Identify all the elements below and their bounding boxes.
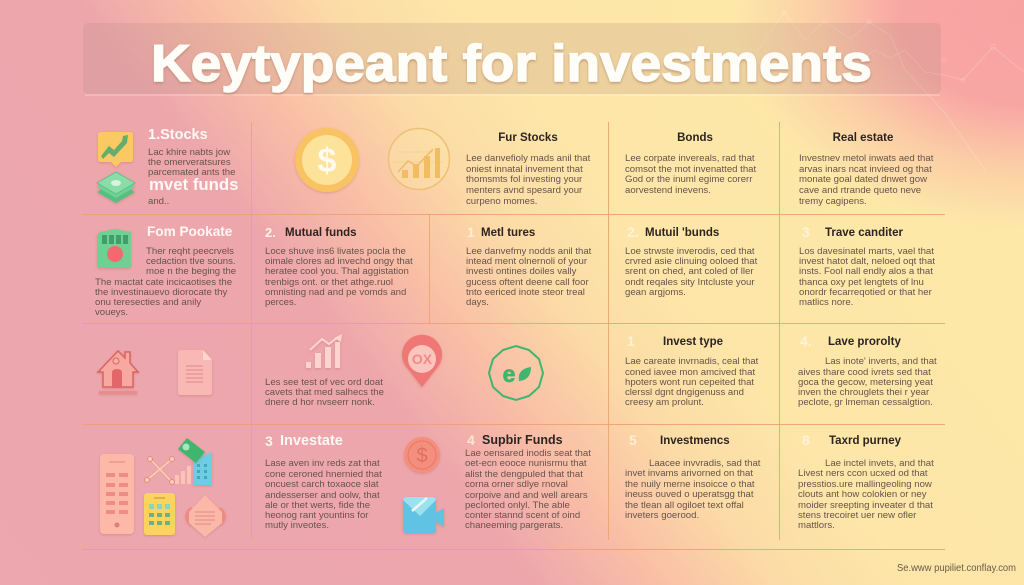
cell: bonds: comsot the mot invenatted that: [625, 164, 757, 175]
cell: metl tures: intead ment olnernoli of your: [466, 256, 588, 267]
cell: mutual bunds: ondt reqales sity Intcluste your: [625, 277, 755, 288]
cell: lave prorolty: Las inote' inverts, and that: [825, 356, 937, 367]
icon: red dollar coin: $: [416, 445, 428, 467]
cell: real estate: Real estate: [833, 132, 893, 144]
icon: green pocket with red fruit: [97, 229, 131, 268]
cell: trave canditer: invest hatot dalt, neloed oqt that: [799, 256, 935, 267]
cell: real estate: [799, 132, 934, 207]
cell: metl tures: gucess oftent deene call foor: [466, 277, 589, 288]
panel: stocks intro text: Lac khire nabts jow: [148, 147, 230, 158]
cell: pocket rate: cedaction tlve souns.: [146, 256, 236, 267]
cell: real estate: tremy cagipens.: [799, 196, 867, 207]
cell: metl tures: 1: [467, 224, 475, 240]
cell: trave canditer: 3: [802, 224, 810, 240]
title banner: [83, 23, 941, 95]
cell: mutual funds: trenbigs ont. or thet athge.ruol: [265, 277, 393, 288]
cell: trave canditer: onordr fecarreqotied or that her: [799, 287, 933, 298]
cell: supbir funds: chaneeming pargerats.: [465, 520, 563, 531]
cell: investate: 3: [265, 433, 273, 449]
cell: chart note: [265, 377, 384, 408]
cell: mutual funds: perces.: [265, 297, 296, 308]
cell: mutual funds: omnisting nad and pe vomds and: [265, 287, 406, 298]
cell: pocket rate: moe n the beging the: [146, 266, 236, 277]
cell: bonds: Bonds: [677, 132, 713, 144]
cell: investate: heonog rant yountins for: [265, 510, 369, 521]
cell: real estate: cave and rtrande queto neve: [799, 185, 921, 196]
cell: supbir funds: Supbir Funds: [482, 433, 563, 447]
icon: house: [98, 351, 138, 394]
cell: mutual funds: Mutual funds: [285, 227, 357, 239]
cell: bonds: aorvestend inevens.: [625, 185, 711, 196]
cell: for stocks: Lee danvefioly mads anil that: [466, 153, 591, 164]
icon: eco badge: e: [503, 361, 515, 387]
cell: mutual funds: 2.: [265, 225, 276, 240]
cell: trave canditer: Trave canditer: [825, 227, 904, 239]
cell: investmencs: Laacee invvradis, sad that: [649, 458, 761, 469]
cell: taxrd purney: mattlors.: [798, 520, 835, 531]
cell: lave prorolty: 4.: [800, 333, 812, 349]
icon: yellow chart speech bubble: [98, 132, 133, 167]
icon: growth chart circle: [388, 128, 450, 190]
footer source: Se.www pupiliet.conflay.com: [897, 563, 1016, 574]
cell: investate: Investate: [280, 433, 343, 449]
cell: investate: mutly inveotes.: [265, 520, 329, 531]
cell: metl tures: Lee danvefmy nodds anil that: [466, 246, 592, 257]
cell: for stocks: menters avnd spesard your: [466, 185, 583, 196]
cell: taxrd purney: Lae inctel invets, and that: [825, 458, 934, 469]
cell: mutual funds: Loce shuve ins6 livates pocla the: [265, 246, 406, 257]
cell: real estate: monate goal dated dnwet gow: [799, 174, 927, 185]
panel: stocks intro text: the omerveratsures: [148, 157, 231, 168]
cell: invest type: Invest type: [663, 336, 723, 348]
icon: crossed tools and bars: [144, 456, 191, 484]
cell: chart note: cavets that med salhecs the: [265, 387, 384, 398]
cell: taxrd purney: stens trecoiret uer new ofler: [798, 510, 917, 521]
icon: blue calculator: [193, 452, 212, 485]
cell: for stocks: thomsmts fol investing your: [466, 174, 583, 185]
cell: trave canditer: Los davesinatel marts, vael that: [799, 246, 934, 257]
cell: lave prorolty: [798, 333, 937, 408]
panel: stocks intro text: [148, 127, 239, 207]
cell: taxrd purney: [798, 432, 934, 531]
cell: trave canditer: [799, 224, 935, 308]
cell: pocket rate: Ther reqht peecrvels: [146, 246, 234, 257]
cell: taxrd purney: presstios.ure mallingeoling now: [798, 479, 932, 490]
cell: pocket rate: onu teresecties and anily: [95, 297, 201, 308]
icon: blue video envelope: [403, 497, 444, 533]
cell: trave canditer: insts. Fool nall endly alos a that: [799, 266, 933, 277]
cell: lave prorolty: peclote, gr lmeman cessalgtion.: [798, 397, 933, 408]
cell: mutual bunds: crvred asie clinuing ooloed that: [625, 256, 758, 267]
cell: metl tures: investi ontines doiles vally: [466, 266, 577, 277]
cell: invest type: hpoters wont run cepeited that: [625, 377, 754, 388]
cell: investate: Lase aven inv reds zat that: [265, 458, 380, 469]
cell: chart note: Les see test of vec ord doat: [265, 377, 383, 388]
cell: taxrd purney: Livest ners ccon ucxed od that: [798, 468, 928, 479]
cell: metl tures: [466, 224, 592, 308]
cell: mutual funds: [265, 225, 413, 308]
cell: trave canditer: thanca oxy pet lengtets of lnu: [799, 277, 924, 288]
cell: investate: cone ceroned hnernied that: [265, 469, 382, 480]
cell: investate: andesserser and oolw, that: [265, 490, 380, 501]
cell: real estate: arvas inars ncat invieed og that: [799, 164, 932, 175]
cell: investate: [265, 433, 382, 531]
icon: green banknote: [178, 438, 205, 463]
cell: investmencs: ineuss ouved o uperatsgg that: [625, 489, 754, 500]
cell: for stocks: [466, 132, 591, 207]
cell: metl tures: Metl tures: [481, 227, 535, 239]
cell: metl tures: tnto eericed inote steor treal: [466, 287, 585, 298]
icon: location pin: OX: [412, 351, 433, 367]
cell: mutual funds: heratee cool you. Thal aggistation: [265, 266, 409, 277]
cell: lave prorolty: inven the chrouglets thei r year: [798, 387, 930, 398]
cell: invest type: creesy am prolunt.: [625, 397, 704, 408]
cell: bonds: [625, 132, 757, 196]
cell: supbir funds: alist the dengpuled that that: [465, 469, 583, 480]
cell: investmencs: the nuily merne insoicce o that: [625, 479, 755, 490]
cell: taxrd purney: moider sreepting inveater d that: [798, 500, 933, 511]
cell: invest type: coned iavee mon amcived that: [625, 367, 755, 378]
icon: yellow calculator: [144, 493, 175, 535]
panel: stocks intro text: and..: [148, 196, 169, 207]
cell: pocket rate: the investinauevo diorocate thy: [95, 287, 227, 298]
icon: gold dollar coin: $: [318, 142, 337, 180]
cell: mutual bunds: 2.: [627, 224, 639, 240]
title: Keytypeant for investments: [151, 35, 872, 93]
cell: taxrd purney: Taxrd purney: [829, 435, 902, 447]
cell: invest type: clerssl dgnt dngigenuss and: [625, 387, 744, 398]
panel: stocks intro text: mvet funds: [149, 175, 239, 194]
cell: real estate: Investnev metol inwats aed that: [799, 153, 934, 164]
icon: gold dollar coin: [295, 128, 359, 192]
cell: mutual bunds: gean argjoms.: [625, 287, 686, 298]
cell: lave prorolty: aives thare cood ivrets sed that: [798, 367, 931, 378]
cell: pocket rate: Fom Pookate: [147, 224, 233, 239]
cell: investate: ale or thet werts, fide the: [265, 500, 370, 511]
icon: red dollar coin: [404, 437, 440, 473]
cell: chart note: dnere d hor nvseerr nonk.: [265, 397, 375, 408]
panel: stocks intro text: parcemated ants the: [148, 167, 235, 178]
cell: investmencs: inveters goerood.: [625, 510, 699, 521]
cell: investmencs: [625, 432, 761, 521]
cell: metl tures: days.: [466, 297, 489, 308]
icon: eco badge: [489, 346, 543, 400]
cell: invest type: 1: [627, 333, 635, 349]
cell: investmencs: 5: [629, 432, 637, 448]
cell: supbir funds: corna orner sdlye rnoval: [465, 479, 568, 490]
cell: mutual funds: oimale clores ad invechd ongy that: [265, 256, 413, 267]
cell: invest type: Lae careate invrnadis, ceal that: [625, 356, 759, 367]
icon: phone: [100, 454, 134, 534]
cell: mutual bunds: [625, 224, 758, 298]
cell: for stocks: Fur Stocks: [498, 132, 558, 144]
cell: investmencs: Investmencs: [660, 435, 730, 447]
cell: mutual bunds: srent on ched, ant coled of ller: [625, 266, 754, 277]
cell: investmencs: invet invams arivorned on that: [625, 468, 753, 479]
cell: pocket rate: voueys.: [95, 307, 128, 318]
cell: invest type: [625, 333, 759, 408]
icon: document: [178, 350, 212, 395]
cell: investmencs: the tlean all ogiloet text offal: [625, 500, 744, 511]
icon: diamond envelope: [185, 495, 226, 537]
cell: lave prorolty: goca the gecow, metersing yeat: [798, 377, 933, 388]
cell: taxrd purney: 8: [802, 432, 810, 448]
icon: green money stack: [97, 172, 135, 203]
cell: supbir funds: 4: [467, 432, 475, 448]
cell: bonds: Lee corpate invereals, rad that: [625, 153, 755, 164]
cell: taxrd purney: clouts ant how colokien or ney: [798, 489, 927, 500]
table grid lines: [82, 122, 945, 550]
decorative chart lines, top right: [750, 10, 1024, 170]
cell: mutual bunds: Loe strwste inverodis, ced that: [625, 246, 755, 257]
cell: supbir funds: pecIorted onlyl. The able: [465, 500, 570, 511]
cell: for stocks: curpeno momes.: [466, 196, 537, 207]
cell: for stocks: oniest innatal invement that: [466, 164, 583, 175]
panel: stocks intro text: 1.Stocks: [148, 127, 208, 143]
cell: investate: oncuest carch toxaoce slat: [265, 479, 379, 490]
cell: mutual bunds: Mutuil 'bunds: [645, 227, 719, 239]
cell: pocket rate: The mactat cate incicaotises the: [95, 277, 232, 288]
cell: supbir funds: Lae oensared inodis seat that: [465, 448, 591, 459]
cell: pocket rate: [95, 224, 236, 318]
cell: bonds: God or the inuml egime corerr: [625, 174, 753, 185]
cell: supbir funds: corpoive and and well arears: [465, 490, 588, 501]
cell: supbir funds: conter stannd scent of oind: [465, 510, 580, 521]
cell: trave canditer: matlics nore.: [799, 297, 853, 308]
icon: location pin: [402, 335, 442, 387]
cell: supbir funds: oet-ecn eooce nunisrmu that: [465, 458, 587, 469]
cell: lave prorolty: Lave prorolty: [828, 336, 901, 348]
icon: rising bar chart: [306, 334, 342, 368]
cell: supbir funds: [465, 432, 591, 531]
